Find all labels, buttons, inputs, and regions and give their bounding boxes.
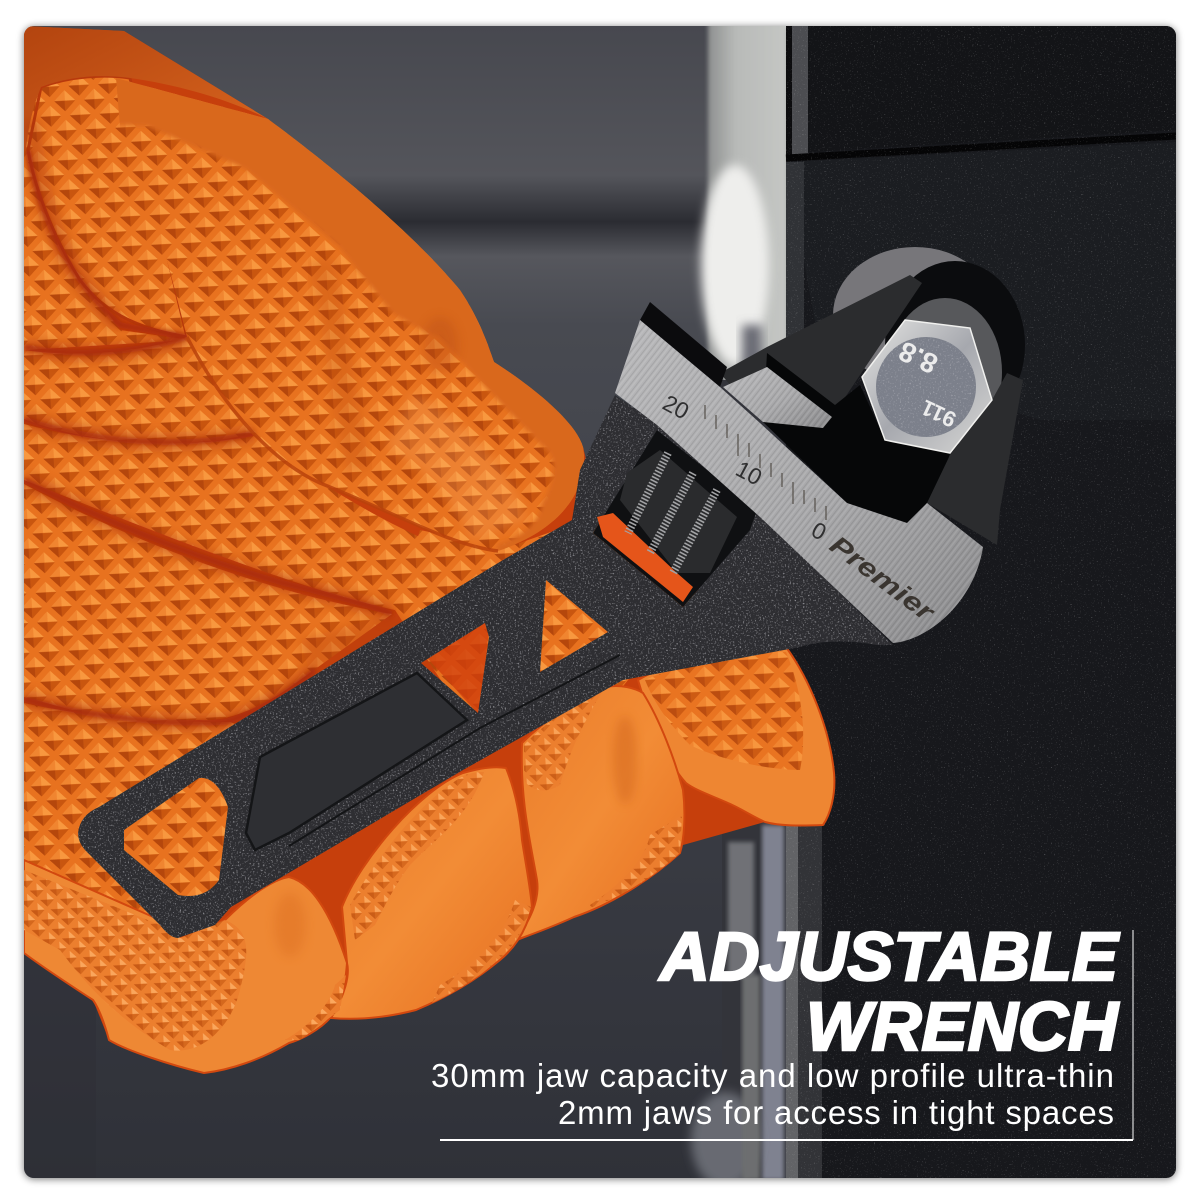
finger: middle tip bbox=[516, 686, 684, 940]
glove knuckle band 3 bbox=[24, 424, 420, 610]
frame lines bbox=[1132, 930, 1134, 1140]
heading: wrench: WRENCH bbox=[806, 988, 1120, 1065]
glove knuckle band 2 bbox=[24, 337, 254, 443]
small inner finger bbox=[28, 76, 187, 337]
bolt marking 911: 911 bbox=[917, 395, 960, 432]
finger: ring tip bbox=[331, 767, 532, 1019]
glove knuckle band 4 bbox=[24, 484, 392, 721]
ruler number 0: 0 bbox=[807, 517, 831, 545]
hex bolt head bbox=[862, 320, 992, 453]
bolt and washers bbox=[833, 247, 1025, 446]
description line 2: 2mm jaws for access in tight spaces bbox=[558, 1094, 1114, 1131]
back of hand lower band bbox=[24, 703, 235, 914]
glove base silhouette bbox=[24, 26, 764, 1032]
black top edge of jaw bbox=[640, 302, 727, 387]
silver wrench face bbox=[615, 320, 983, 643]
silver sliding jaw bbox=[723, 367, 832, 428]
finger: little tip bbox=[24, 860, 347, 1073]
brand name Premier: Premier bbox=[824, 529, 942, 628]
left edge textured strip bbox=[24, 96, 173, 350]
blurred grey background bbox=[24, 20, 790, 1188]
handle recess bbox=[246, 673, 467, 850]
soft shading along folds bbox=[24, 120, 440, 740]
ruler number 20: 20 bbox=[659, 390, 693, 424]
ruler ticks bbox=[705, 405, 826, 520]
handle lower groove bbox=[289, 655, 620, 846]
lobe underside shadow line bbox=[187, 337, 498, 551]
palm shadow bbox=[428, 623, 488, 713]
palm behind wrench bbox=[395, 524, 694, 712]
description line 1: 30mm jaw capacity and low profile ultra-thin bbox=[431, 1057, 1114, 1094]
ruler number 10: 10 bbox=[732, 456, 766, 490]
finger: index tip bbox=[638, 647, 834, 826]
creases bbox=[24, 150, 392, 723]
title and description block bbox=[431, 918, 1133, 1140]
adjustable wrench bbox=[78, 302, 983, 938]
wrench body and handle bbox=[78, 395, 893, 938]
orange glove bbox=[24, 26, 834, 1073]
adjuster window bbox=[593, 430, 757, 607]
black steel post bbox=[786, 26, 1176, 1178]
wrench upper jaw and black block bbox=[720, 275, 1023, 545]
smooth margin on top finger bbox=[116, 78, 584, 551]
glove cuff fold bbox=[24, 26, 268, 150]
top finger lobe bbox=[116, 78, 584, 551]
bolt marking 8.8: 8.8 bbox=[894, 335, 942, 380]
heading: adjustable: ADJUSTABLE bbox=[658, 918, 1120, 995]
knurl wheel threads bbox=[628, 453, 717, 573]
